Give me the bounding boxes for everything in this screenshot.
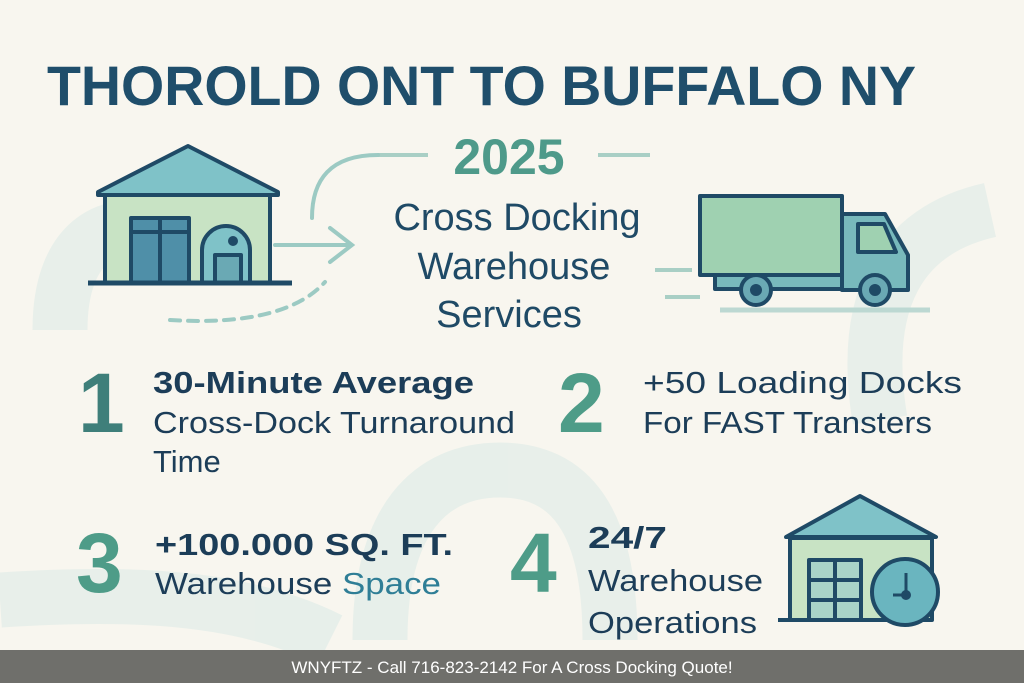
icon: warehouse with clock — [778, 496, 938, 625]
item 2 — [558, 356, 962, 450]
footer bar: WNYFTZ - Call 716-823-2142 For A Cross Docking Quote! — [291, 658, 733, 677]
item 3: +100.000 SQ. FT. — [155, 527, 453, 562]
item 4: Operations — [588, 605, 757, 640]
icon: warehouse — [88, 146, 292, 283]
item 3: Warehouse Space — [155, 566, 441, 601]
background swooshes — [0, 210, 990, 640]
item 1: Cross-Dock Turnaround — [153, 405, 515, 440]
item 2: For FAST Transters — [643, 405, 932, 440]
item 2: 2 — [558, 356, 605, 450]
title: THOROLD ONT TO BUFFALO NY — [47, 54, 916, 117]
subtitle: Cross Docking — [393, 197, 641, 239]
subtitle: Services — [436, 294, 582, 336]
item 1 — [78, 356, 515, 479]
item 4: 24/7 — [588, 520, 667, 555]
item 1: Time — [153, 444, 221, 479]
subtitle: Warehouse — [418, 246, 610, 288]
icon: truck — [655, 196, 930, 310]
item 4: Warehouse — [588, 563, 763, 598]
item 1: 1 — [78, 356, 125, 450]
footer bar — [0, 650, 1024, 683]
item 3: 3 — [76, 516, 123, 610]
item 1: 30-Minute Average — [153, 365, 474, 400]
item 3 — [76, 516, 453, 610]
item 4 — [510, 516, 763, 640]
arrow: warehouse to services — [170, 155, 378, 321]
item 2: +50 Loading Docks — [643, 365, 962, 400]
item 4: 4 — [510, 516, 557, 610]
year heading: 2025 — [453, 129, 565, 185]
subtitle — [393, 197, 641, 336]
